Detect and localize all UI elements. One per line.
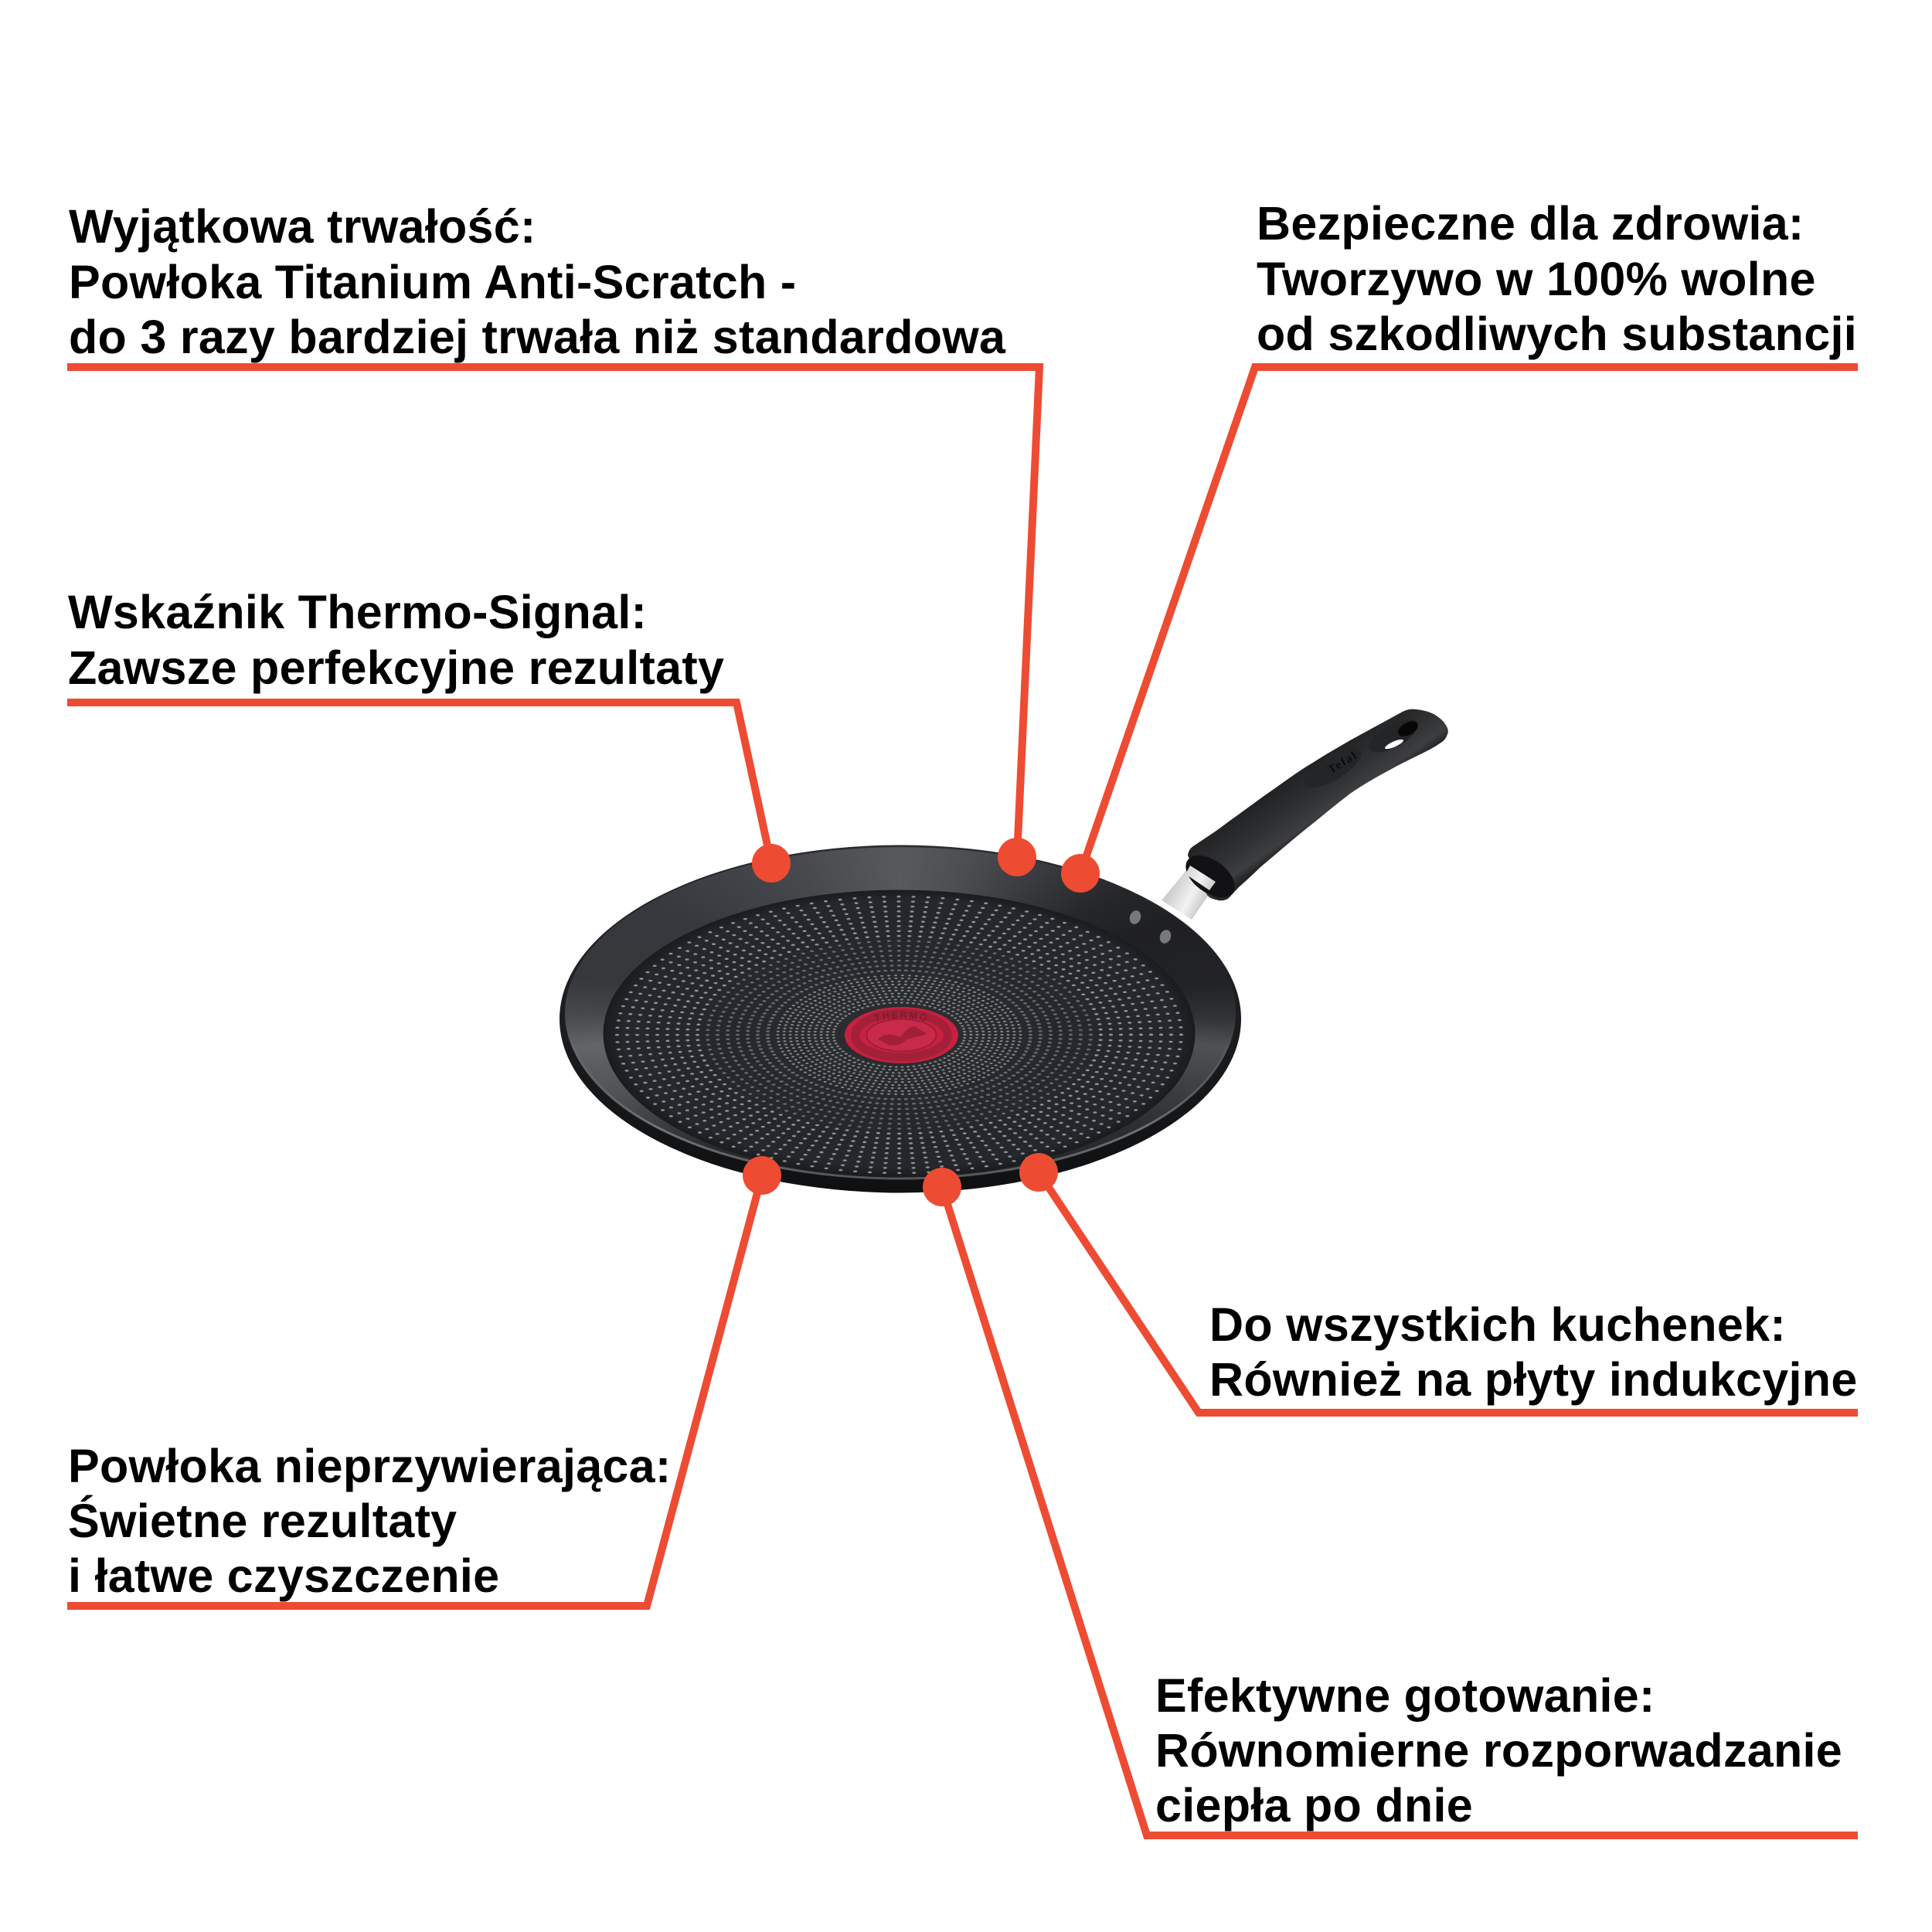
marker	[1061, 854, 1100, 893]
wall lower highlight line	[568, 857, 1233, 1179]
hourglass mark	[878, 1026, 927, 1046]
handle end face	[1179, 847, 1242, 906]
thermo spot	[845, 1007, 958, 1063]
callout: Bezpieczne dla zdrowia	[1061, 197, 1858, 893]
text block: Zawsze perfekcyjne rezultaty	[68, 641, 724, 694]
leader line	[1039, 1172, 1858, 1413]
callout: Powłoka nieprzywierająca	[67, 1156, 781, 1606]
text block: Bezpieczne dla zdrowia:	[1257, 197, 1804, 250]
spot ring text: THERMO	[873, 1011, 927, 1022]
text block: Również na płyty indukcyjne	[1209, 1353, 1858, 1406]
text block	[1257, 197, 1857, 360]
logo: Tefal	[1326, 749, 1360, 777]
text block: Do wszystkich kuchenek:	[1209, 1298, 1786, 1351]
text block	[68, 586, 724, 694]
leader line	[1080, 367, 1858, 873]
text block	[68, 1440, 671, 1602]
callout: Wskaźnik Thermo-Signal	[67, 586, 791, 883]
text block: Tworzywo w 100% wolne	[1257, 253, 1816, 305]
text block: Powłoka nieprzywierająca:	[68, 1440, 671, 1492]
leader line	[67, 367, 1039, 857]
text block: Świetne rezultaty	[68, 1495, 457, 1547]
bracket entering handle	[1185, 866, 1216, 890]
pan wall	[565, 847, 1236, 1179]
marker	[1019, 1153, 1058, 1192]
logo pod	[1299, 740, 1367, 795]
text block: Powłoka Titanium Anti-Scratch -	[69, 256, 796, 308]
metal handle bracket	[1162, 866, 1217, 920]
text block: od szkodliwych substancji	[1257, 308, 1857, 360]
pan illustration	[560, 709, 1448, 1193]
leader line	[942, 1187, 1858, 1835]
text block: ciepła po dnie	[1155, 1779, 1473, 1832]
marker	[998, 838, 1036, 876]
text block	[1209, 1298, 1858, 1406]
callout: Efektywne gotowanie	[923, 1168, 1858, 1835]
marker	[752, 844, 791, 883]
pan dot texture	[617, 896, 1181, 1173]
pan cooking surface	[576, 890, 1226, 1179]
text block: Wyjątkowa trwałość:	[69, 200, 536, 253]
marker	[923, 1168, 961, 1206]
text block: i łatwe czyszczenie	[68, 1549, 499, 1602]
text block: Efektywne gotowanie:	[1155, 1669, 1655, 1722]
text block	[1155, 1669, 1842, 1832]
handle	[1179, 709, 1448, 906]
pan floor	[603, 890, 1195, 1178]
leader line	[67, 1175, 762, 1606]
rivets	[1128, 909, 1173, 945]
leader line	[67, 702, 771, 863]
text block: Wskaźnik Thermo-Signal:	[68, 586, 647, 638]
text block: Równomierne rozporwadzanie	[1155, 1724, 1842, 1777]
text block: do 3 razy bardziej trwała niż standardowa	[69, 311, 1006, 363]
marker	[743, 1156, 781, 1195]
hole highlight	[1384, 738, 1404, 750]
pan handle and body outline	[560, 709, 1448, 1193]
callout: Do wszystkich kuchenek	[1019, 1153, 1858, 1413]
callout: Wyjątkowa trwałość	[67, 200, 1039, 876]
handle hole recess	[1364, 713, 1423, 759]
handle hole	[1396, 718, 1420, 740]
pan outer silhouette	[560, 845, 1241, 1193]
text block	[69, 200, 1006, 363]
